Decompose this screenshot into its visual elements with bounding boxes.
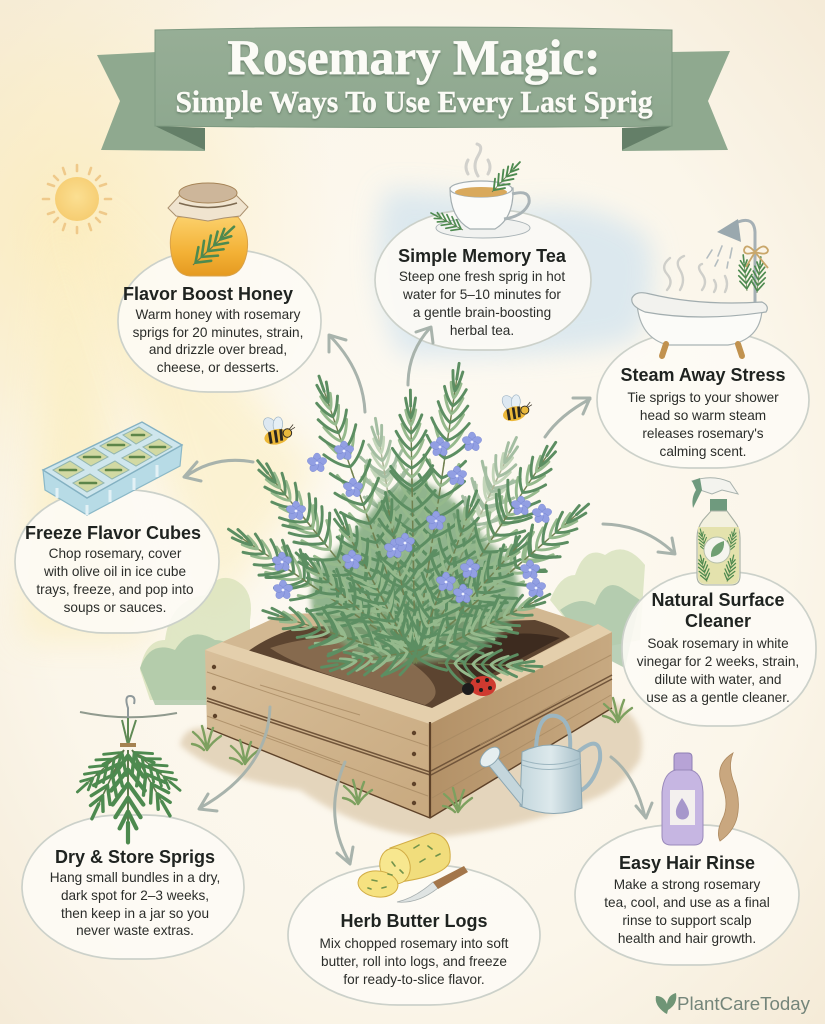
body text: a gentle brain-boosting bbox=[413, 305, 551, 320]
body text: dark spot for 2–3 weeks, bbox=[61, 888, 209, 903]
body text: Mix chopped rosemary into soft bbox=[320, 936, 509, 951]
panel: flavor boost honey bbox=[118, 250, 321, 392]
body text: vinegar for 2 weeks, strain, bbox=[637, 654, 799, 669]
icon: butter logs and knife bbox=[357, 833, 468, 902]
heading: Cleaner bbox=[685, 611, 751, 631]
body text: soups or sauces. bbox=[64, 600, 166, 615]
body text: herbal tea. bbox=[450, 323, 514, 338]
arrow: to tea bbox=[408, 327, 433, 385]
icon: bathtub and shower head bbox=[632, 219, 768, 356]
blue flowers bbox=[271, 432, 553, 604]
arrow: to drying bbox=[199, 707, 270, 811]
body text: cheese, or desserts. bbox=[157, 360, 279, 375]
body text: then keep in a jar so you bbox=[61, 906, 209, 921]
rosemary plant bbox=[215, 360, 604, 688]
icon: hanging rosemary bundle bbox=[70, 696, 187, 842]
banner left tail bbox=[97, 52, 205, 151]
title line one: Rosemary Magic: bbox=[228, 29, 600, 85]
banner right tail bbox=[622, 51, 730, 151]
panel: simple memory tea bbox=[375, 210, 591, 350]
planter front right face bbox=[430, 632, 612, 818]
body text: head so warm steam bbox=[640, 408, 766, 423]
icon: spray bottle bbox=[692, 478, 740, 585]
body text: water for 5–10 minutes for bbox=[402, 287, 561, 302]
panel: steam away stress bbox=[597, 332, 809, 468]
heading: Simple Memory Tea bbox=[398, 246, 567, 266]
panel: natural surface cleaner bbox=[622, 572, 816, 726]
arrows from plant to panels bbox=[184, 327, 675, 864]
body text: rinse to support scalp bbox=[622, 913, 752, 928]
body text: butter, roll into logs, and freeze bbox=[321, 954, 507, 969]
icon: bee right bbox=[500, 393, 532, 423]
body text: Chop rosemary, cover bbox=[49, 546, 182, 561]
panel: dry and store sprigs bbox=[22, 815, 244, 959]
banner main ribbon bbox=[155, 27, 672, 128]
icon: watering can bbox=[477, 716, 600, 814]
arrow: to steam bbox=[545, 398, 590, 437]
main branches bbox=[296, 368, 439, 667]
body text: for ready-to-slice flavor. bbox=[343, 972, 485, 987]
title line two: Simple Ways To Use Every Last Sprig bbox=[176, 84, 653, 119]
small grass tufts bbox=[192, 698, 632, 812]
body text: Steep one fresh sprig in hot bbox=[399, 269, 565, 284]
body text: trays, freeze, and pop into bbox=[36, 582, 194, 597]
heading: Freeze Flavor Cubes bbox=[25, 523, 201, 543]
bushes behind the planter bbox=[140, 549, 645, 705]
soil bbox=[247, 620, 570, 712]
panel: easy hair rinse bbox=[575, 825, 799, 965]
body text: dilute with water, and bbox=[655, 672, 781, 687]
body text: Hang small bundles in a dry, bbox=[50, 870, 220, 885]
icon: ladybird bbox=[462, 676, 496, 696]
arrow: to freeze bbox=[184, 460, 253, 481]
body text: Warm honey with rosemary bbox=[136, 307, 301, 322]
soft green foliage mass bbox=[311, 480, 519, 662]
body text: health and hair growth. bbox=[618, 931, 756, 946]
planter front left face bbox=[205, 650, 430, 818]
icon: shampoo bottle and hair bbox=[662, 753, 738, 845]
body text: calming scent. bbox=[660, 444, 746, 459]
heading: Easy Hair Rinse bbox=[619, 853, 755, 873]
body text: never waste extras. bbox=[76, 923, 194, 938]
pale back branches bbox=[352, 414, 538, 669]
icon: tea cup bbox=[428, 144, 530, 238]
body text: Make a strong rosemary bbox=[614, 877, 760, 892]
heading: Flavor Boost Honey bbox=[123, 284, 293, 304]
body text: Tie sprigs to your shower bbox=[627, 390, 779, 405]
body text: Soak rosemary in white bbox=[647, 636, 789, 651]
arrow: to hair rinse bbox=[611, 757, 652, 818]
body text: with olive oil in ice cube bbox=[43, 564, 186, 579]
body text: use as a gentle cleaner. bbox=[646, 690, 790, 705]
heading: Steam Away Stress bbox=[620, 365, 786, 385]
dense low branches bbox=[255, 588, 426, 684]
icon: ice cube tray bbox=[43, 422, 182, 515]
heading: Dry & Store Sprigs bbox=[55, 847, 215, 867]
panel: freeze flavor cubes bbox=[15, 490, 219, 633]
icon: honey jar bbox=[168, 183, 248, 276]
title banner bbox=[97, 27, 730, 151]
logo: PlantCareToday: PlantCareToday bbox=[677, 994, 810, 1014]
raised wooden planter bbox=[205, 608, 612, 818]
icon: sun bbox=[43, 165, 111, 233]
body text: and drizzle over bread, bbox=[149, 342, 287, 357]
ground soil patch bbox=[180, 700, 642, 838]
body text: releases rosemary's bbox=[642, 426, 764, 441]
body text: tea, cool, and use as a final bbox=[604, 895, 770, 910]
arrow: to honey bbox=[329, 335, 365, 412]
arrow: to butter bbox=[335, 762, 353, 864]
icon: bee left bbox=[261, 415, 295, 447]
panel: herb butter logs bbox=[288, 865, 540, 1005]
arrow: to cleaner bbox=[603, 524, 675, 554]
planter back rim bbox=[205, 608, 612, 722]
heading: Natural Surface bbox=[651, 590, 785, 610]
body text: sprigs for 20 minutes, strain, bbox=[133, 325, 303, 340]
heading: Herb Butter Logs bbox=[340, 911, 488, 931]
